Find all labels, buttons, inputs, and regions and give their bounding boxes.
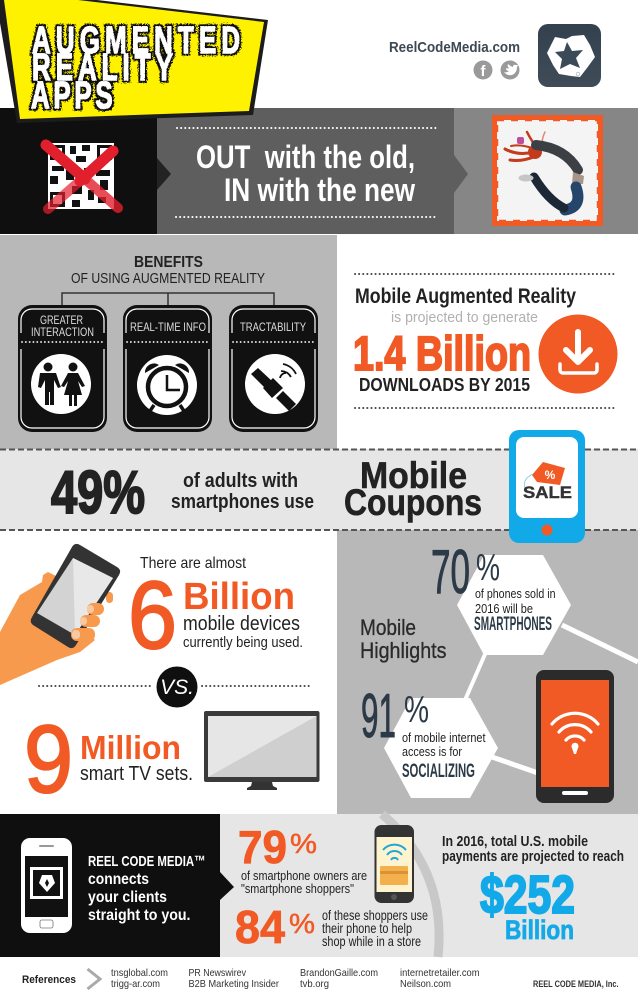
references footer: References	[22, 974, 76, 986]
references footer: REEL CODE MEDIA, Inc.	[533, 979, 618, 989]
card: greater interaction: GREATER	[40, 313, 83, 327]
statistic: 79 percent: 79	[238, 821, 287, 873]
downloads statistic: DOWNLOADS BY 2015	[359, 375, 530, 395]
statistic: 79 percent: of smartphone owners are	[241, 868, 367, 883]
statistic: 84 percent	[235, 901, 428, 953]
statistic: 6 billion mobile devices	[128, 555, 303, 669]
hexagon: 70 percent smartphones: 2016 will be	[475, 601, 533, 616]
crossed out QR code	[46, 143, 118, 209]
statistic: 6 billion mobile devices: currently being used.	[183, 634, 303, 651]
statistic: 252 billion mobile payments: $252	[480, 865, 575, 925]
panel: reel code media connects: connects	[88, 871, 149, 888]
statistic: 252 billion mobile payments: Billion	[505, 915, 574, 945]
statistic: 84 percent: shop while in a store	[322, 933, 421, 949]
panel: reel code media connects: straight to you.	[88, 907, 190, 924]
mobile coupons statistic: Mobile	[360, 455, 467, 496]
heading: out with the old, in with the new: IN with the new	[224, 172, 415, 208]
card: greater interaction	[18, 305, 107, 432]
card: tractability: TRACTABILITY	[240, 320, 306, 334]
arrow: dark to grey panel	[454, 155, 468, 193]
statistic: 252 billion mobile payments	[442, 833, 624, 945]
title banner: Augmented Reality Apps	[0, 0, 268, 123]
downloads statistic: 1.4 Billion	[353, 328, 531, 381]
references footer: B2B Marketing Insider	[188, 978, 279, 990]
icon: blue phone with sale tag: %	[545, 468, 556, 482]
versus divider: VS.	[160, 676, 194, 699]
icon: blue phone with sale tag: SALE	[523, 483, 572, 502]
references footer: PR Newswirev	[188, 967, 247, 979]
statistic: 9 million smart TV sets: 9	[24, 706, 73, 813]
mobile coupons statistic: of adults with	[183, 470, 298, 492]
hexagon: 70 percent smartphones: SMARTPHONES	[474, 614, 552, 635]
hexagon: 91 percent socializing: of mobile internet	[402, 730, 486, 745]
benefits heading	[71, 254, 265, 287]
icon: blue phone with sale tag	[509, 430, 585, 543]
framed photo: jumping dancer	[492, 115, 603, 226]
title banner: Augmented Reality Apps: REALITY	[32, 46, 173, 88]
hexagon: 91 percent socializing: 91	[361, 682, 396, 751]
references footer: tvb.org	[300, 978, 329, 990]
statistic: 6 billion mobile devices: 6	[128, 562, 177, 669]
benefits heading: OF USING AUGMENTED REALITY	[71, 270, 265, 287]
heading: out with the old, in with the new: OUT with the old,	[196, 139, 415, 175]
references footer: Neilson.com	[400, 978, 451, 990]
statistic: 6 billion mobile devices: There are almost	[140, 555, 246, 572]
statistic: 84 percent: their phone to help	[322, 920, 412, 936]
title banner: Augmented Reality Apps: AUGMENTED	[32, 19, 240, 61]
versus divider	[39, 666, 309, 708]
hexagon: 91 percent socializing: %	[404, 689, 429, 731]
hexagon: 70 percent smartphones: 70	[431, 538, 470, 607]
references footer: internetretailer.com	[400, 967, 480, 979]
statistic: 9 million smart TV sets	[24, 706, 193, 813]
hexagon: 91 percent socializing: access is for	[402, 744, 463, 759]
card: tractability	[229, 305, 318, 432]
hexagon: 70 percent smartphones: of phones sold in	[475, 586, 556, 601]
logo badge	[538, 24, 601, 87]
statistic: 9 million smart TV sets: smart TV sets.	[80, 763, 193, 785]
statistic: 79 percent: %	[290, 828, 317, 859]
arrow: black panel to light panel	[220, 872, 234, 900]
statistic: 252 billion mobile payments: In 2016, total U.S. mobile	[442, 833, 588, 850]
references footer: BrandonGaille.com	[300, 967, 378, 979]
downloads statistic	[353, 274, 615, 408]
panel: reel code media connects: REEL CODE MEDIA™	[88, 853, 206, 870]
heading: mobile highlights: Mobile	[360, 615, 416, 640]
card: greater interaction: INTERACTION	[31, 325, 94, 339]
mobile coupons statistic: Coupons	[344, 482, 482, 523]
panel: reel code media connects	[21, 838, 206, 933]
heading: mobile highlights: Highlights	[360, 638, 446, 663]
icon: television	[204, 711, 320, 790]
icon: download	[538, 314, 618, 394]
connector lines	[465, 625, 638, 773]
arrow: black to dark panel	[157, 158, 171, 190]
icon: phone with payment card	[374, 825, 414, 903]
website and social icons	[389, 39, 520, 80]
references footer: tnsglobal.com	[111, 967, 168, 979]
statistic: 84 percent: of these shoppers use	[322, 907, 428, 923]
hexagon: 91 percent socializing	[361, 682, 498, 798]
statistic: 84 percent: %	[289, 908, 315, 939]
references footer: trigg-ar.com	[111, 978, 160, 990]
statistic: 84 percent: 84	[235, 901, 285, 953]
hexagon: 91 percent socializing: SOCIALIZING	[402, 761, 475, 782]
downloads statistic: is projected to generate	[391, 309, 538, 326]
statistic: 79 percent: "smartphone shoppers"	[241, 881, 354, 896]
illustration: hand holding phone	[0, 544, 120, 685]
mobile coupons statistic: smartphones use	[171, 491, 314, 513]
mobile coupons statistic	[51, 455, 482, 526]
heading: mobile highlights	[360, 615, 446, 663]
statistic: 6 billion mobile devices: Billion	[183, 576, 295, 618]
downloads statistic: Mobile Augmented Reality	[355, 285, 576, 308]
decorative arc	[382, 814, 439, 957]
statistic: 6 billion mobile devices: mobile devices	[183, 613, 300, 635]
card: real-time info	[123, 305, 212, 432]
bracket connector	[62, 293, 274, 306]
references footer	[22, 967, 618, 990]
panel: reel code media connects: your clients	[88, 889, 167, 906]
card: real-time info: REAL-TIME INFO	[130, 320, 206, 334]
icon: phone with wifi	[536, 670, 614, 803]
benefits heading: BENEFITS	[134, 254, 203, 271]
hexagon: 70 percent smartphones	[431, 538, 571, 655]
title banner: Augmented Reality Apps: APPS	[31, 74, 113, 116]
hexagon: 70 percent smartphones: %	[476, 547, 500, 589]
website and social icons: f	[480, 63, 486, 80]
statistic: 79 percent	[238, 821, 367, 896]
mobile coupons statistic: 49%	[51, 459, 145, 526]
heading: out with the old, in with the new	[176, 128, 437, 217]
statistic: 9 million smart TV sets: Million	[80, 729, 181, 766]
website and social icons: ReelCodeMedia.com	[389, 39, 520, 56]
